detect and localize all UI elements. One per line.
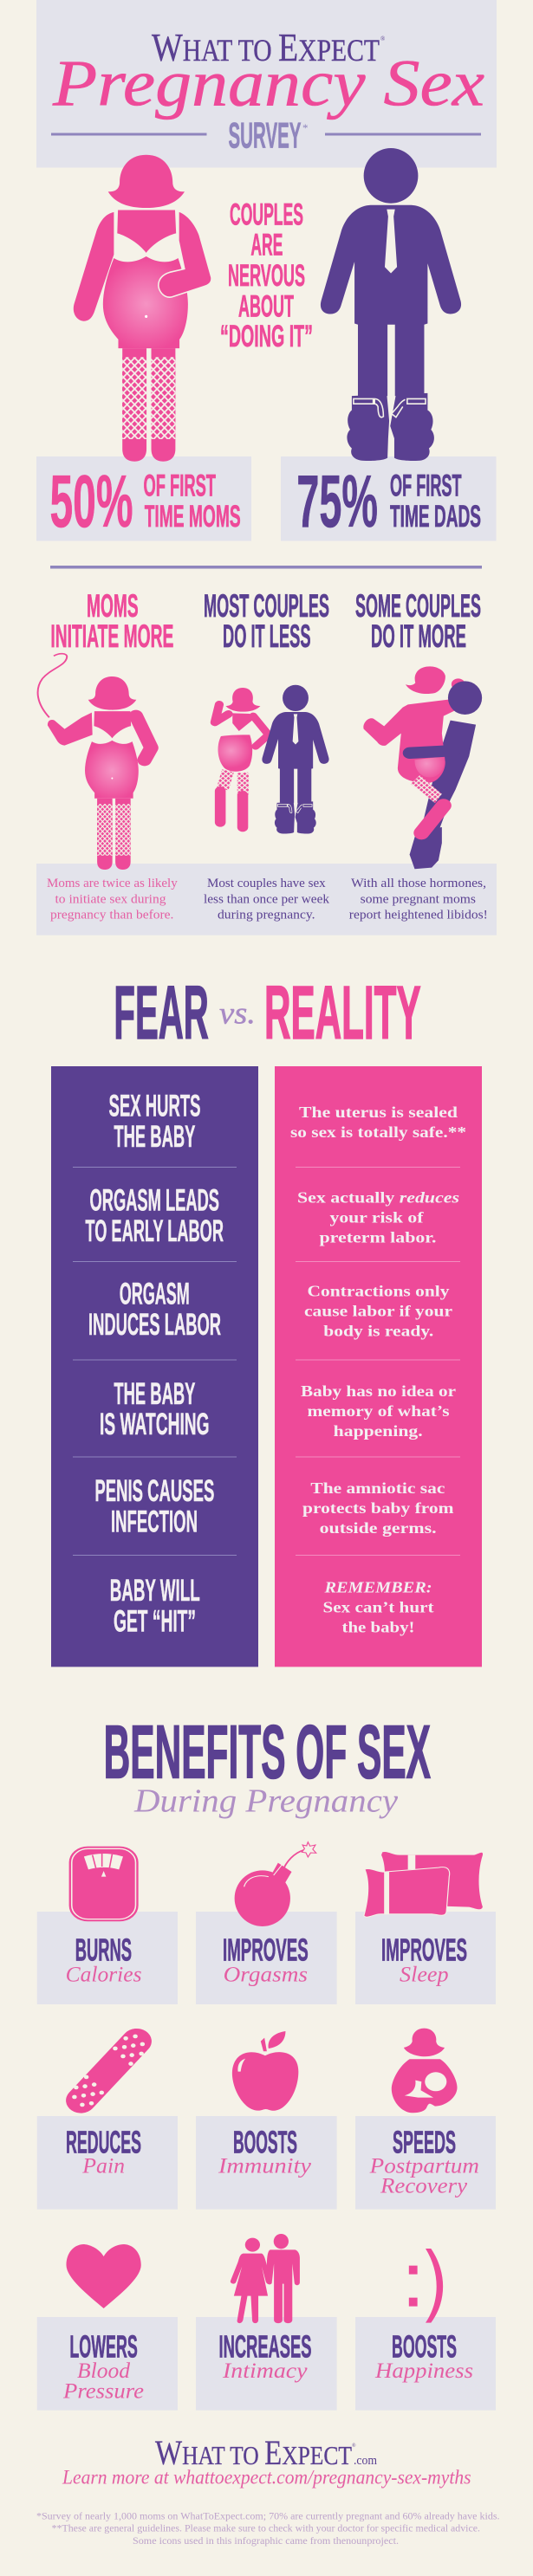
header panel [36,0,497,168]
reality items: body is ready. [323,1323,433,1340]
icon: couple embracing [363,666,482,869]
caption: moms: to initiate sex during [55,892,166,906]
benefit: boosts immunity [196,2031,337,2210]
benefit: lowers blood pressure: Blood [77,2359,131,2383]
text: MOST COUPLES [204,588,329,624]
benefit: increases intimacy: INCREASES [218,2329,312,2365]
fear items: GET “HIT” [114,1605,196,1639]
caption: most couples [204,877,329,922]
fear items: PENIS CAUSES [94,1474,214,1508]
stat panel: dads [281,456,496,543]
benefit: burns calories [37,1847,178,2004]
survey rule left [51,133,206,135]
footer logo: WHAT TO EXPECT [155,2433,352,2472]
icon: bathroom scale [69,1847,139,1921]
fear items: TO EARLY LABOR [85,1214,224,1248]
benefit: improves sleep [355,1852,496,2004]
couples are nervous callout: “DOING IT” [220,320,313,353]
icon: pillows [364,1852,483,1917]
benefit: burns calories: Calories [66,1963,142,1986]
couples are nervous callout: NERVOUS [228,259,305,293]
heading: most couples do it less [204,588,329,654]
icon: pregnant woman figure [74,155,211,462]
fear items: THE BABY [114,1377,195,1411]
caption: moms [47,877,178,922]
heading: moms initiate more [50,588,173,654]
benefit: lowers blood pressure: LOWERS [69,2329,138,2365]
caption: moms: Moms are twice as likely [47,877,178,890]
couples are nervous callout: ABOUT [238,289,294,323]
reality items: Contractions only [307,1283,449,1300]
header panel: SURVEY [229,115,302,156]
benefit: reduces pain [37,2035,178,2210]
main title: Pregnancy Sex [52,48,484,120]
stat 50%: 50% [50,461,133,543]
heading: fear vs reality: vs. [219,996,256,1031]
caption: some couples: With all those hormones, [351,877,486,890]
footnotes [36,2511,500,2547]
heading: fear vs reality [114,971,421,1055]
reality items: the baby! [341,1619,414,1636]
heading: fear vs reality: FEAR [114,971,209,1055]
footnotes: *Survey of nearly 1,000 moms on WhatToExpect.com; 70% are currently pregnant and 60% already have kids. [36,2511,500,2521]
benefit: boosts happiness [355,2249,496,2411]
reality items: preterm labor. [319,1228,437,1246]
reality items: your risk of [329,1208,425,1226]
benefit: burns calories: BURNS [75,1932,132,1967]
fear items [85,1089,224,1639]
benefit: speeds postpartum recovery: Recovery [380,2175,468,2198]
reality items: protects baby from [302,1499,454,1517]
caption: some couples: some pregnant moms [361,892,476,906]
caption: moms: pregnancy than before. [50,909,173,922]
stat panel: moms [36,456,251,543]
icon: man figure with trousers down [321,148,461,461]
caption: most couples: during pregnancy. [218,909,315,922]
benefit: boosts immunity: Immunity [218,2154,312,2178]
fear items: INDUCES LABOR [88,1308,221,1342]
reality items: Baby has no idea or [301,1382,456,1400]
icon: smiley emoticon [409,2249,443,2323]
benefit: reduces pain: Pain [81,2154,125,2178]
fear items: SEX HURTS [109,1089,201,1123]
reality items: cause labor if your [304,1303,452,1320]
benefit: lowers blood pressure [37,2244,178,2411]
survey rule right [325,133,481,135]
reality items [290,1104,466,1636]
reality items: memory of what’s [307,1402,449,1420]
panel: fears [51,1066,258,1667]
stat label: OF FIRST [390,469,462,503]
icon: bomb [235,1842,316,1926]
benefit: improves sleep: Sleep [400,1963,449,1986]
reality items: The uterus is sealed [299,1104,458,1121]
benefit: improves orgasms: Orgasms [224,1963,308,1986]
caption: some couples: report heightened libidos! [349,909,488,922]
caption panel [36,864,497,935]
fear items: THE BABY [114,1120,195,1154]
benefit: lowers blood pressure: Pressure [62,2379,144,2403]
benefit: increases intimacy: Intimacy [222,2359,309,2383]
heading: most couples do it less: DO IT LESS [223,618,310,654]
caption: most couples: less than once per week [204,892,329,906]
couples are nervous callout: COUPLES [230,198,303,232]
reality items: Sex can’t hurt [322,1599,433,1616]
subheading: during pregnancy: During Pregnancy [133,1783,398,1820]
icon: nursing mother [392,2029,458,2113]
couples are nervous callout [220,198,313,353]
stat label: OF FIRST [144,469,216,503]
couples are nervous callout: ARE [250,229,283,262]
brand logo: WHAT TO EXPECT [152,25,380,69]
footer logo: .com [354,2454,377,2468]
benefit: improves orgasms: IMPROVES [223,1932,309,1967]
benefit: reduces pain: REDUCES [66,2125,141,2160]
benefit: increases intimacy [196,2234,337,2411]
icon: bandage [72,2035,145,2107]
footer link: Learn more at whattoexpect.com/pregnancy-sex-myths [62,2467,471,2489]
stat 75%: 75% [296,461,378,543]
benefit: speeds postpartum recovery: SPEEDS [393,2125,456,2160]
panel: realities [275,1066,482,1667]
caption: most couples: Most couples have sex [207,877,326,890]
benefit: speeds postpartum recovery [355,2029,496,2210]
reality items: outside germs. [320,1519,437,1537]
benefit: boosts happiness: Happiness [374,2359,473,2383]
icon: couple standing apart [215,685,329,834]
caption: some couples [349,877,488,922]
icon: heart [66,2244,141,2308]
reality items: REMEMBER: [323,1579,432,1596]
benefit: boosts immunity: BOOSTS [233,2125,297,2160]
footnotes: **These are general guidelines. Please make sure to check with your doctor for specific medical advice. [52,2524,480,2534]
icon: apple [232,2031,298,2111]
icon: couple holding hands [231,2234,300,2323]
fear items: BABY WILL [110,1574,200,1608]
registered mark: ® [380,36,386,42]
reality items: Sex actually reduces [297,1188,459,1206]
fear items: INFECTION [111,1505,198,1538]
reality items: The amniotic sac [310,1479,445,1497]
heading: moms initiate more: MOMS [87,588,139,624]
fear items: ORGASM [120,1277,190,1311]
benefit: improves orgasms [196,1842,337,2004]
stat panel: moms: TIME MOMS [145,500,241,534]
icon: woman with raised whip [38,654,152,870]
footer logo: ® [352,2443,356,2449]
fear items: ORGASM LEADS [90,1184,219,1218]
benefit: boosts happiness: BOOSTS [392,2329,457,2365]
reality items: so sex is totally safe.** [290,1123,466,1141]
benefit: speeds postpartum recovery: Postpartum [369,2154,479,2178]
footnotes: Some icons used in this infographic came from thenounproject. [133,2536,399,2547]
reality items: happening. [334,1422,423,1440]
heading: some couples do it more [355,588,481,654]
survey asterisk: * [302,121,309,134]
heading: moms initiate more: INITIATE MORE [50,618,173,654]
fear items: IS WATCHING [100,1408,210,1441]
